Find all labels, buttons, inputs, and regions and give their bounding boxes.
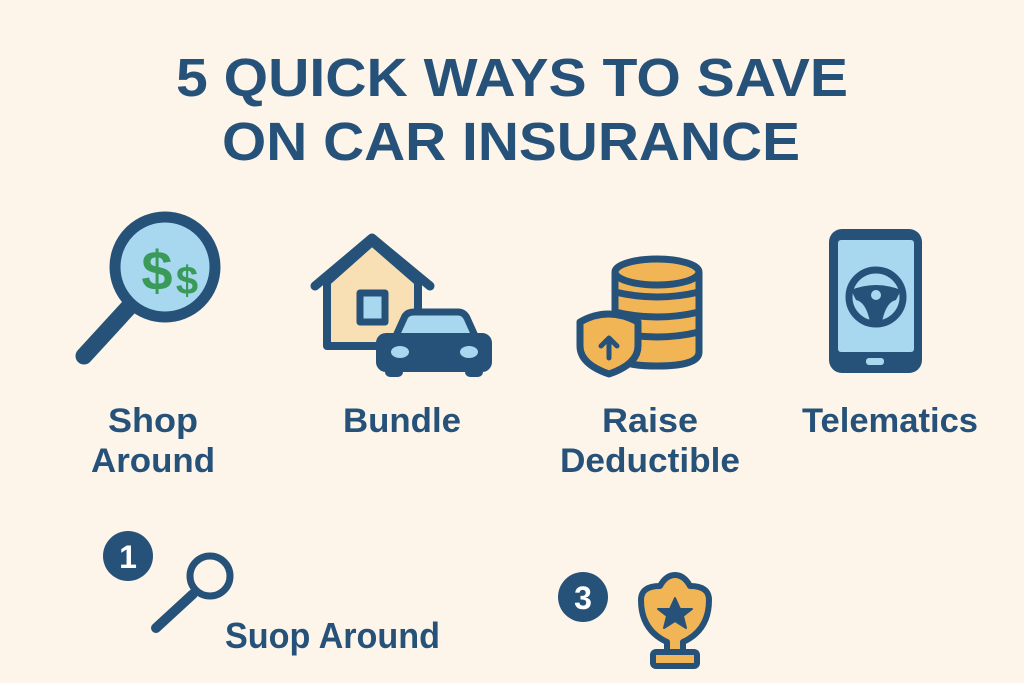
- label: Shop Around: Around: [91, 442, 215, 480]
- icon: coin stack with shield: [580, 259, 699, 374]
- icon: small magnifier: [156, 556, 230, 628]
- title: 5 QUICK WAYS TO SAVE: [176, 48, 848, 108]
- label: Bundle: Bundle: [343, 402, 461, 440]
- title: [176, 48, 848, 172]
- icon: magnifier with dollars: $: [141, 239, 173, 302]
- label: Telematics: Telematics: [802, 402, 978, 440]
- label: Raise Deductible: [560, 402, 740, 480]
- label: Shop Around: [91, 402, 215, 480]
- badge: number 1: [103, 531, 153, 581]
- icon: house and car: [315, 238, 490, 376]
- label: Shop Around: Shop: [108, 402, 198, 440]
- icon: phone with steering wheel: [829, 229, 922, 373]
- icon: magnifier with dollars: [84, 217, 215, 356]
- label: Raise Deductible: Raise: [602, 402, 698, 440]
- badge: number 1: 1: [119, 539, 137, 575]
- badge: number 3: 3: [574, 580, 592, 616]
- icon: magnifier with dollars: $: [176, 259, 198, 303]
- title: ON CAR INSURANCE: [222, 112, 800, 172]
- label: Suop Around: Suop Around: [225, 615, 440, 656]
- label: Raise Deductible: Deductible: [560, 442, 740, 480]
- icon: trophy: [641, 575, 709, 666]
- badge: number 3: [558, 572, 608, 622]
